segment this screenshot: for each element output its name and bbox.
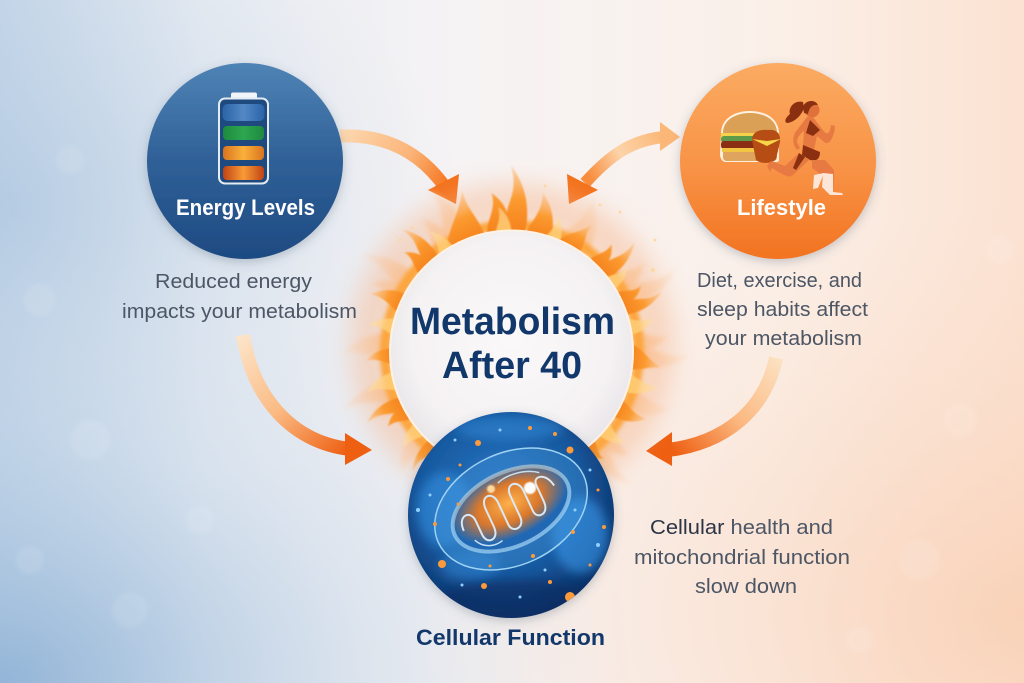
text block: cellular description: Cellular health and [650, 517, 833, 539]
icon: mitochondrion [434, 447, 588, 571]
panel: central circle [390, 230, 633, 474]
text block: lifestyle description: your metabolism [705, 328, 862, 350]
panel: lifestyle [680, 63, 876, 259]
arrow: lifestyle to cellular function [646, 358, 776, 466]
text block: cellular description [634, 517, 850, 598]
stars [433, 426, 606, 602]
text block: cellular description: slow down [695, 576, 797, 598]
text block: energy levels description [122, 271, 357, 323]
text block: cellular description: mitochondrial function [634, 547, 850, 569]
title: After 40 [442, 345, 582, 387]
flame ring [337, 165, 693, 494]
text block: energy levels description: impacts your metabolism [122, 301, 357, 323]
title: Metabolism [410, 301, 615, 343]
arrow: energy levels to cellular function [243, 335, 372, 465]
text block: lifestyle description [697, 270, 868, 350]
arrow: lifestyle two-way [567, 122, 680, 204]
label: energy levels: Energy Levels [176, 195, 315, 220]
text block: lifestyle description: sleep habits affect [697, 299, 868, 321]
label: cellular function: Cellular Function [416, 625, 605, 650]
icon: burger [720, 111, 781, 163]
title [410, 301, 615, 387]
icon: battery [219, 92, 268, 184]
panel: energy levels [147, 63, 343, 259]
icon: apple [752, 130, 780, 163]
text block: energy levels description: Reduced energy [155, 271, 312, 293]
text block: lifestyle description: Diet, exercise, and [697, 270, 862, 292]
panel: cellular function [408, 412, 614, 650]
label: lifestyle: Lifestyle [737, 195, 826, 220]
icon: runner [767, 101, 843, 195]
arrow: energy levels to metabolism [340, 136, 459, 204]
